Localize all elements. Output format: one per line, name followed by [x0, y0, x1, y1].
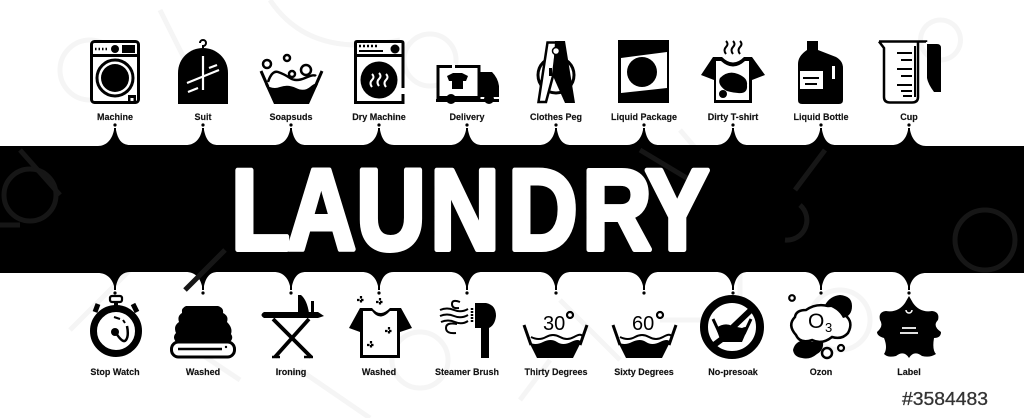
icon: thirty degrees basin: [524, 312, 587, 358]
label: soapsuds: Soapsuds: [269, 112, 313, 122]
icon: sixty degrees basin: 60: [632, 313, 654, 335]
label: washed t-shirt: Washed: [362, 367, 396, 377]
label: stop watch: Stop Watch: [90, 367, 140, 377]
icon: machine: [92, 42, 138, 103]
label: sixty degrees: Sixty Degrees: [614, 367, 674, 377]
icon: ozon cloud: [789, 295, 852, 358]
black title band: [0, 128, 1024, 290]
icon: clothes peg: [538, 41, 575, 103]
label: dry machine: Dry Machine: [352, 112, 406, 122]
label: thirty degrees: Thirty Degrees: [524, 367, 588, 377]
icon: liquid package: [618, 40, 669, 103]
icon: measuring cup: [879, 42, 941, 102]
icon: delivery truck: [436, 63, 499, 104]
label: label tag: Label: [897, 367, 921, 377]
icon: dry machine: [356, 42, 403, 102]
label: dirty t-shirt: Dirty T-shirt: [708, 112, 758, 122]
label: liquid package: Liquid Package: [611, 112, 677, 122]
icon: washed stack: [172, 306, 234, 357]
icon: stop watch: [94, 296, 138, 354]
icon: dirty t-shirt: [701, 41, 765, 103]
title: LAUNDRY: [231, 146, 709, 274]
label: liquid bottle: Liquid Bottle: [794, 112, 848, 122]
icon: sixty degrees basin: [613, 312, 676, 358]
stock id: #3584483: [902, 389, 988, 409]
icon: soapsuds: [261, 55, 322, 104]
label: cup: Cup: [900, 112, 918, 122]
icon: suit: [178, 40, 228, 104]
label: ironing: Ironing: [276, 367, 306, 377]
label: no-presoak: No-presoak: [708, 367, 759, 377]
icon: washed t-shirt: [349, 296, 412, 358]
icon: ozon cloud: O: [808, 310, 824, 333]
label: steamer brush: Steamer Brush: [435, 367, 499, 377]
icon: steamer brush: [440, 301, 496, 358]
label: suit: Suit: [194, 112, 212, 122]
icon: ozon cloud: 3: [825, 320, 832, 335]
icon: liquid bottle: [798, 41, 843, 104]
icon: ironing board: [262, 295, 324, 357]
label: delivery: Delivery: [449, 112, 485, 122]
label: ozon: Ozon: [810, 367, 832, 377]
label: clothes peg: Clothes Peg: [530, 112, 582, 122]
icon: label tag: [877, 296, 941, 358]
label: machine: Machine: [97, 112, 133, 122]
label: washed stack: Washed: [186, 367, 220, 377]
icon: thirty degrees basin: 30: [543, 313, 565, 335]
icon: no-presoak: [704, 299, 760, 355]
connector dots: [113, 123, 911, 295]
